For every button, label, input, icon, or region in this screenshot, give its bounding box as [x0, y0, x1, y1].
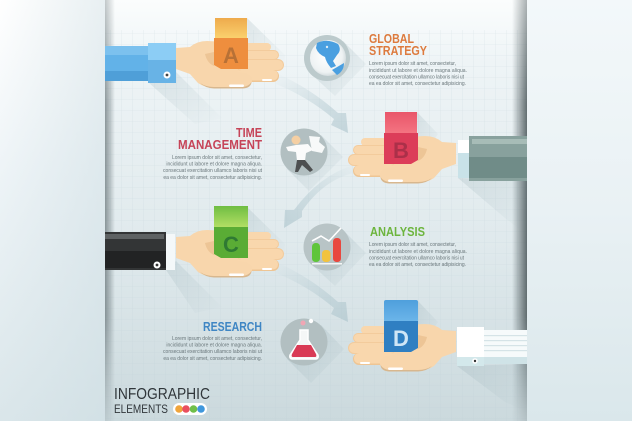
logo title: infographic elements: INFOGRAPHIC [114, 386, 210, 403]
heading: analysis: ANALYSIS [370, 225, 425, 239]
block B: B [393, 138, 409, 163]
circle icon: globe [304, 35, 366, 96]
text block: analysis: consecuat exercitation ullamco laboris nisi ut [369, 256, 465, 262]
heading: time management: TIME [236, 126, 262, 140]
text block: analysis [369, 242, 467, 268]
text block: research: incididunt ut labore et dolore magna aliqua. [166, 342, 262, 348]
text block: analysis: Lorem ipsum dolor sit amet, consectetur, [369, 242, 456, 248]
hand D with white sleeve and block [348, 300, 527, 412]
blue sleeve [105, 43, 176, 83]
heading: global strategy: GLOBAL [369, 32, 414, 46]
text block: research [163, 336, 263, 362]
page background right [527, 0, 632, 421]
center panel [105, 0, 527, 421]
heading: time management [178, 126, 262, 152]
block A [214, 18, 248, 69]
black sleeve [105, 232, 175, 270]
logo title: infographic elements [114, 386, 210, 416]
text block: research: Lorem ipsum dolor sit amet, consectetur, [172, 336, 262, 342]
text block: time management: consecuat exercitation ullamco laboris nisi ut [163, 168, 263, 174]
text block: global strategy: consecuat exercitation ullamco laboris nisi ut [369, 74, 465, 80]
text block: global strategy [369, 61, 467, 87]
text block: time management: ea ea dolor sit amet, consectetur adipisicing. [163, 175, 262, 181]
text block: global strategy: Lorem ipsum dolor sit amet, consectetur, [369, 61, 456, 67]
circle icon: flask [280, 318, 344, 383]
arrow: A to B [276, 74, 348, 133]
heading: research: RESEARCH [203, 320, 262, 334]
text block: analysis: ea ea dolor sit amet, consectetur adipisicing. [369, 262, 466, 268]
white sleeve [457, 327, 527, 366]
text block: time management: incididunt ut labore et dolore magna aliqua. [166, 162, 262, 168]
block C [214, 206, 248, 258]
text block: analysis: incididunt ut labore et dolore magna aliqua. [369, 249, 467, 255]
text block: research: ea ea dolor sit amet, consectetur adipisicing. [163, 356, 262, 362]
text block: global strategy: ea ea dolor sit amet, consectetur adipisicing. [369, 81, 466, 87]
heading: time management: MANAGEMENT [178, 138, 262, 152]
gray sleeve [458, 136, 527, 181]
hand C with black sleeve and block [105, 206, 285, 313]
text block: time management: Lorem ipsum dolor sit amet, consectetur, [172, 155, 262, 161]
block D [384, 300, 418, 352]
hand B with gray sleeve and block [348, 112, 527, 235]
text block: global strategy: incididunt ut labore et dolore magna aliqua. [369, 68, 467, 74]
text block: time management [163, 155, 263, 181]
hand A with blue sleeve and block [105, 18, 285, 124]
arrow: B to C [284, 165, 358, 228]
block A: A [223, 43, 239, 68]
logo title: infographic elements: ELEMENTS [114, 404, 168, 416]
circle icon: bar chart [304, 224, 366, 286]
heading: global strategy: STRATEGY [369, 44, 428, 58]
circle icon: running man [280, 128, 343, 191]
block B [384, 112, 418, 164]
block C: C [223, 232, 239, 257]
color dots [173, 403, 207, 415]
block D: D [393, 326, 409, 351]
arrow: C to D [276, 263, 348, 322]
arrow line [312, 228, 341, 241]
page background left [0, 0, 105, 421]
text block: research: consecuat exercitation ullamco laboris nisi ut [163, 349, 263, 355]
heading: global strategy [369, 32, 428, 58]
